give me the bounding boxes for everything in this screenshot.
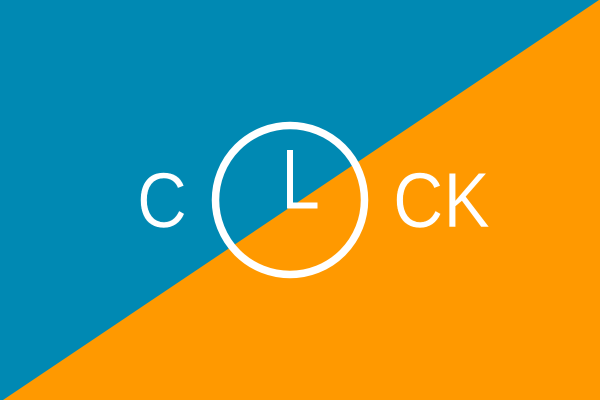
clock hands: [290, 150, 318, 206]
clock face ring: [216, 126, 364, 274]
icon: clock replacing the letter O: [216, 126, 364, 274]
letter C: C: [137, 156, 187, 244]
letters CK: CK: [393, 156, 490, 244]
